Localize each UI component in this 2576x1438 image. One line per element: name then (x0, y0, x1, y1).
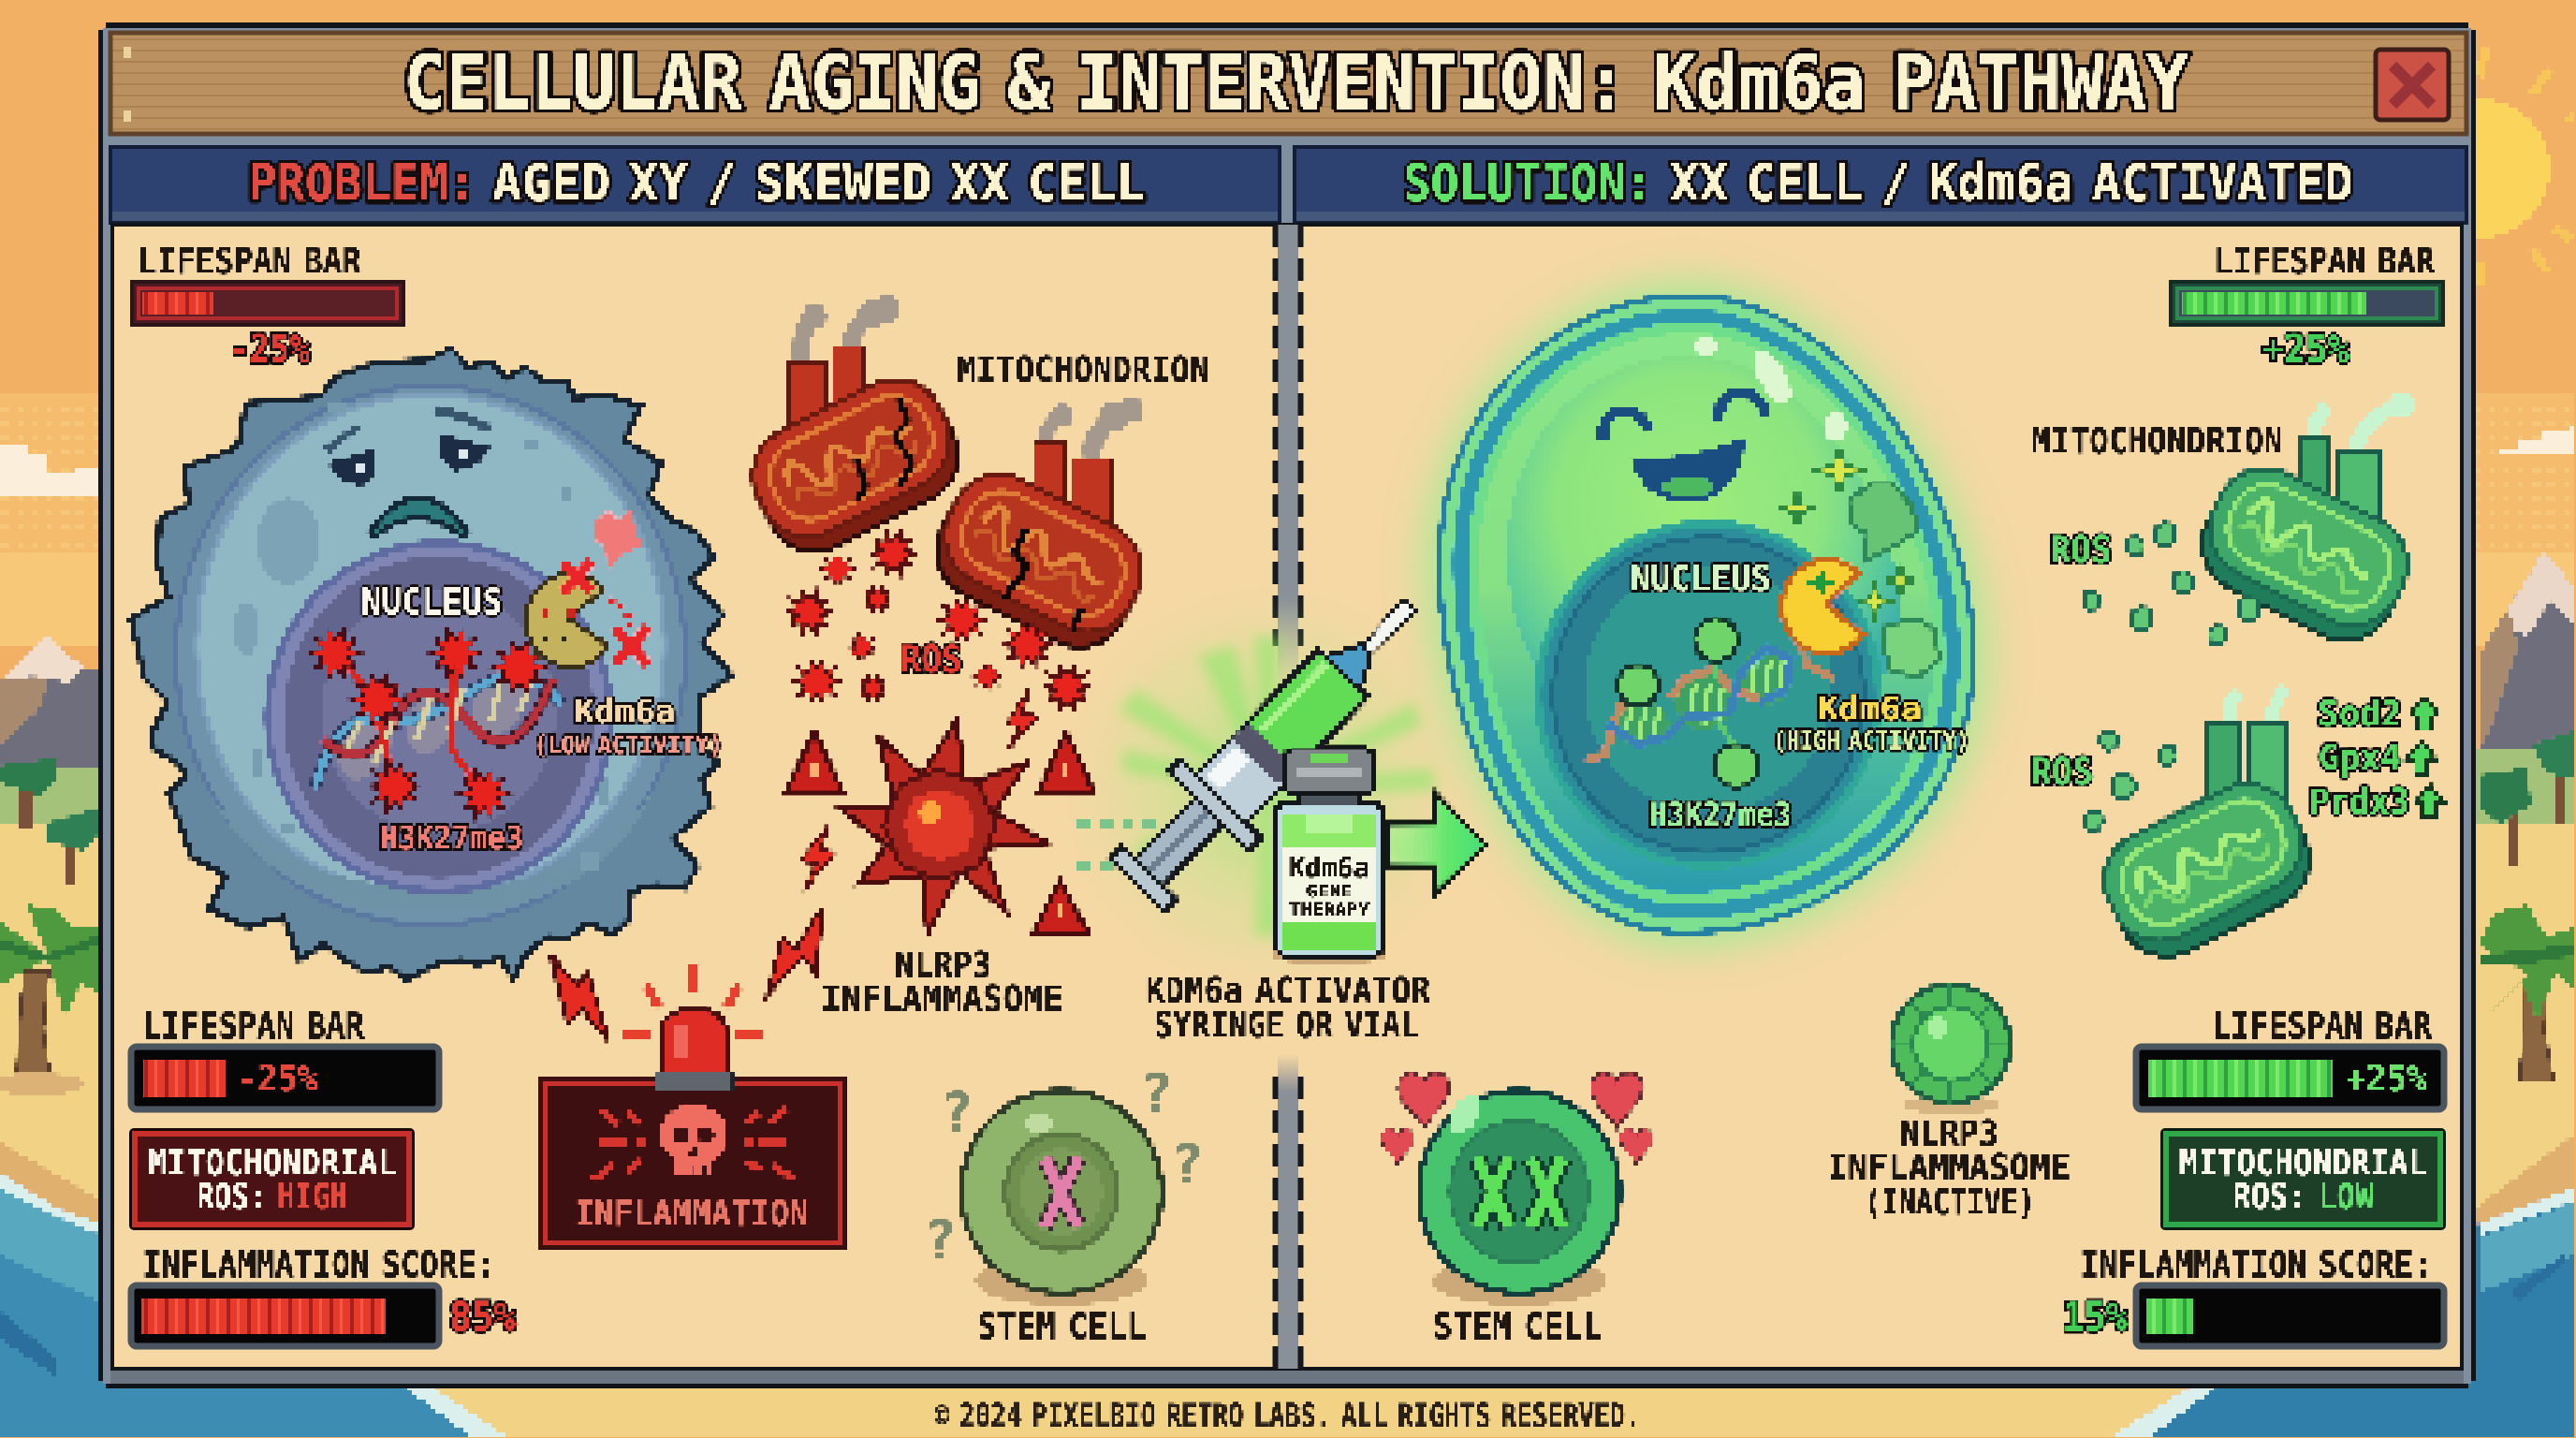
left palms (0, 758, 98, 1095)
gene labels: Gpx4 (2319, 738, 2401, 778)
label: top lifespan: LIFESPAN BAR (2214, 241, 2435, 282)
header: problem: PROBLEM: (248, 154, 476, 213)
question marks: ? (924, 1209, 957, 1272)
footer: © 2024 PIXELBIO RETRO LABS. ALL RIGHTS RESERVED. (934, 1398, 1641, 1435)
DNA helix (1585, 646, 1835, 761)
label: inflammation: INFLAMMATION (575, 1193, 809, 1234)
gene labels (2309, 694, 2409, 822)
ROS particles (786, 532, 1090, 709)
lightning bolts from alarm (550, 908, 822, 1041)
label: NLRP3 inactive: (INACTIVE) (1865, 1181, 2035, 1223)
nucleus (268, 543, 610, 891)
value: ROS high: ROS: HIGH (197, 1176, 347, 1217)
value: +25 percent in bar: +25% (2346, 1058, 2427, 1099)
NLRP3 inflammasome inactive (1892, 985, 2010, 1114)
right cell glow (1425, 281, 1988, 947)
right mountain (2479, 550, 2576, 768)
active Kdm6a pac-man (1782, 560, 1863, 653)
top lifespan bar (132, 282, 403, 325)
vial (1271, 749, 1387, 964)
label: Kdm6a: Kdm6a (1818, 691, 1922, 728)
nucleus (1538, 523, 1879, 866)
label: H3K27me3: H3K27me3 (380, 820, 523, 858)
label: lifespan bar: LIFESPAN BAR (142, 1005, 364, 1047)
content background (112, 225, 2462, 1369)
happy cell (1440, 296, 1973, 932)
label: NLRP3 inactive: NLRP3 (1900, 1113, 1998, 1154)
label: mitochondrial ROS low: MITOCHONDRIAL (2179, 1142, 2427, 1183)
header: solution: XX CELL / Kdm6a ACTIVATED (1670, 154, 2353, 213)
sun (2411, 49, 2576, 286)
alarm light rays (622, 964, 764, 1035)
title: CELLULAR AGING & INTERVENTION: Kdm6a PATHWAY (403, 39, 2188, 126)
question marks: ? (1171, 1133, 1204, 1196)
label: mitochondrion: MITOCHONDRION (957, 349, 1209, 390)
gene labels: Sod2 (2318, 694, 2402, 734)
warning triangles and bolts (786, 688, 1093, 932)
stat bars: solution (2136, 282, 2446, 1346)
histone marks (1617, 618, 1758, 787)
label: mitochondrial ROS high: MITOCHONDRIAL (148, 1142, 397, 1183)
right palms (2479, 730, 2576, 1081)
value: -25 percent in bar: -25% (238, 1058, 317, 1099)
question marks: ? (1140, 1062, 1173, 1125)
gene labels: Prdx3 (2309, 782, 2409, 822)
syringe (1097, 565, 1450, 924)
burst glow behind syringe (1064, 587, 1467, 990)
value: 15 percent: 15% (2062, 1294, 2128, 1340)
top lifespan bar (2171, 282, 2443, 325)
label: syringe or vial: SYRINGE OR VIAL (1154, 1005, 1419, 1046)
label: mitochondrion: MITOCHONDRION (2031, 420, 2283, 462)
inflammation score bar (131, 1285, 439, 1346)
label: inflammation score: INFLAMMATION SCORE: (142, 1244, 495, 1285)
vial label (1289, 852, 1370, 920)
healthy mitochondrion bottom (2088, 689, 2326, 973)
up arrows (2407, 697, 2445, 818)
inflammation alert box (538, 1072, 846, 1249)
question marks: ? (941, 1080, 973, 1144)
lifespan bar (131, 1047, 439, 1109)
value: 85 percent: 85% (449, 1294, 516, 1340)
mitochondrial ROS box (129, 1128, 415, 1230)
alarm beacon (655, 1009, 731, 1091)
label: inflammation score: INFLAMMATION SCORE: (2080, 1244, 2432, 1285)
vial label: THERAPY (1289, 900, 1370, 920)
label: nucleus: NUCLEUS (1631, 558, 1771, 599)
stem cell aged (961, 1091, 1162, 1305)
header: problem: AGED XY / SKEWED XX CELL (492, 154, 1146, 213)
label: nucleus: NUCLEUS (361, 581, 503, 623)
label: lifespan bar: LIFESPAN BAR (2212, 1005, 2432, 1047)
stem cell healthy (1419, 1090, 1619, 1305)
green arrow (1388, 792, 1486, 895)
label: high activity: (HIGH ACTIVITY) (1773, 726, 1969, 756)
text labels: solution (1433, 241, 2435, 1347)
label: inflammasome: INFLAMMASOME (821, 978, 1063, 1020)
value: ROS low: ROS: LOW (2232, 1176, 2374, 1217)
sand and grass (0, 749, 2576, 826)
damaged mitochondrion 1 (737, 296, 974, 568)
left mountain (0, 637, 98, 766)
highlights (1693, 337, 1847, 442)
label: top lifespan: LIFESPAN BAR (138, 241, 361, 282)
vial label: GENE (1306, 882, 1353, 902)
label: H3K27me3: H3K27me3 (1649, 797, 1792, 834)
label: Kdm6a: Kdm6a (575, 694, 675, 731)
value: +25 percent: +25% (2262, 326, 2349, 372)
value: -25 percent: -25% (229, 326, 310, 372)
label: stem cell: STEM CELL (977, 1306, 1147, 1347)
panel: solution artwork (1076, 296, 2445, 1305)
skull icon (660, 1105, 727, 1174)
label: NLRP3 inactive (1827, 1113, 2071, 1223)
inflammation score bar (2136, 1285, 2444, 1346)
hearts (1382, 1073, 1652, 1164)
sad face (323, 404, 494, 536)
label: ROS top: ROS (2050, 529, 2112, 572)
NLRP3 inflammasome active (838, 721, 1046, 932)
low ROS dots (2084, 523, 2259, 830)
header: solution: SOLUTION: (1403, 154, 1653, 213)
label: ROS: ROS (900, 638, 962, 682)
healthy mitochondrion top (2186, 391, 2423, 657)
DNA helix (315, 661, 563, 788)
dashed connector lines (1076, 824, 1165, 866)
label: ROS bottom: ROS (2031, 751, 2093, 794)
vial label: Kdm6a (1289, 852, 1369, 884)
text labels: problem (138, 241, 1430, 1347)
panel: problem artwork (131, 296, 1162, 1305)
antioxidant clouds (1849, 482, 1919, 562)
label: low activity: (LOW ACTIVITY) (534, 731, 723, 760)
lifespan bar (2136, 1047, 2444, 1109)
histone marks (311, 629, 547, 819)
clouds (0, 425, 2576, 497)
smiling face (1603, 393, 1765, 501)
aged cell (131, 348, 731, 979)
header: solution (1295, 147, 2466, 223)
close button (2376, 50, 2449, 120)
label: NLRP3 inactive: INFLAMMASOME (1827, 1147, 2071, 1188)
stat bars: problem (129, 282, 439, 1346)
damaged mitochondrion 2 (920, 397, 1158, 664)
sea (0, 1173, 509, 1438)
label: activator: KDM6a ACTIVATOR (1146, 970, 1430, 1011)
label: NLRP3: NLRP3 (895, 945, 991, 986)
title bar (110, 33, 2466, 134)
header: problem (110, 147, 1280, 223)
mitochondrial ROS box (2160, 1128, 2446, 1230)
low-activity Kdm6a pac-man (526, 510, 648, 668)
question marks (924, 1062, 1204, 1272)
central divider (1275, 225, 1301, 1369)
sparkles (1778, 448, 1916, 618)
label: stem cell: STEM CELL (1433, 1306, 1603, 1347)
